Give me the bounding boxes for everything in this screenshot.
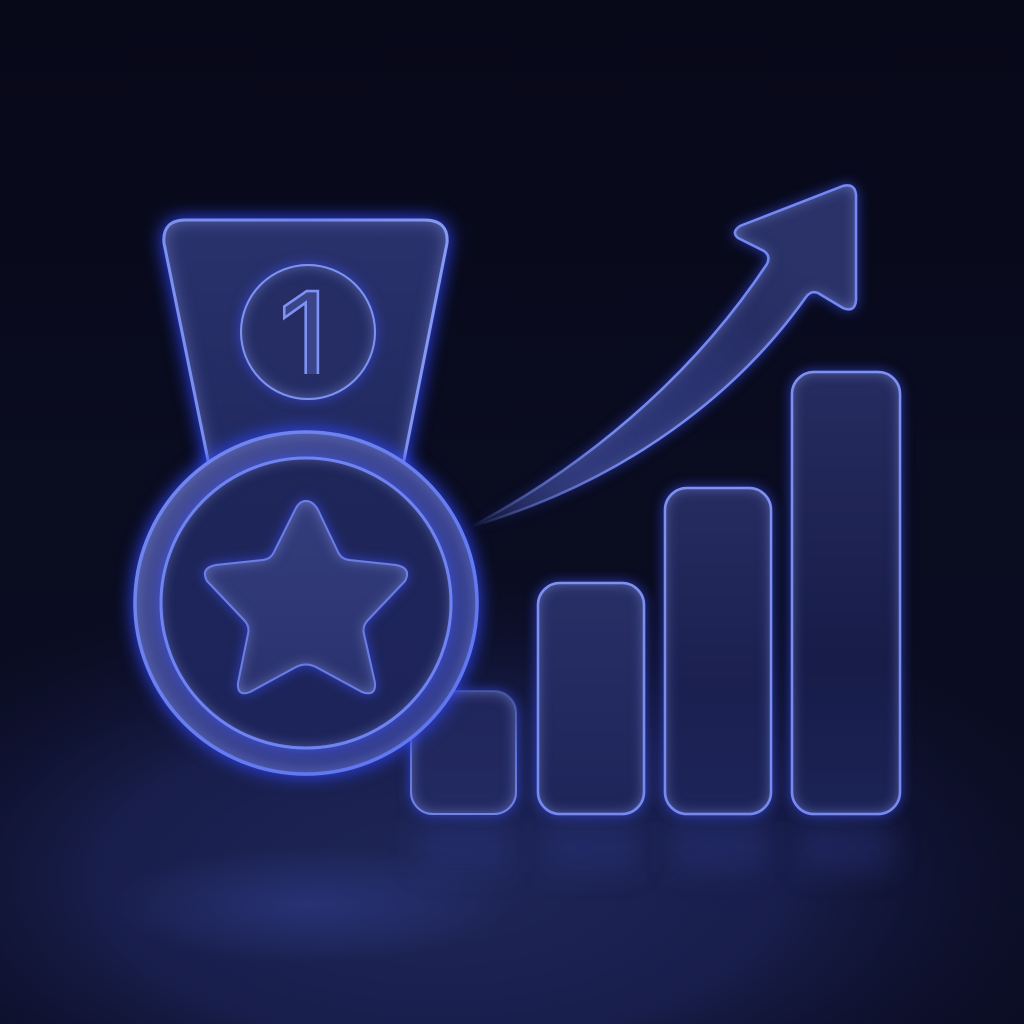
medal outer ring: [135, 432, 477, 774]
floor reflection: [0, 560, 1024, 1024]
bar chart: [411, 372, 900, 814]
star: [205, 501, 407, 693]
bar 4: [792, 372, 900, 814]
bar 3: [665, 488, 771, 814]
bar 1: [411, 691, 516, 814]
badge: number one: [241, 262, 375, 416]
medal inner disc: [161, 458, 451, 748]
badge circle: [241, 265, 375, 399]
medal: [135, 432, 477, 774]
ribbon: [164, 220, 447, 470]
bar 2: [538, 583, 644, 814]
numeral 1: 1: [271, 262, 348, 416]
arrow: rising trend: [470, 185, 856, 527]
